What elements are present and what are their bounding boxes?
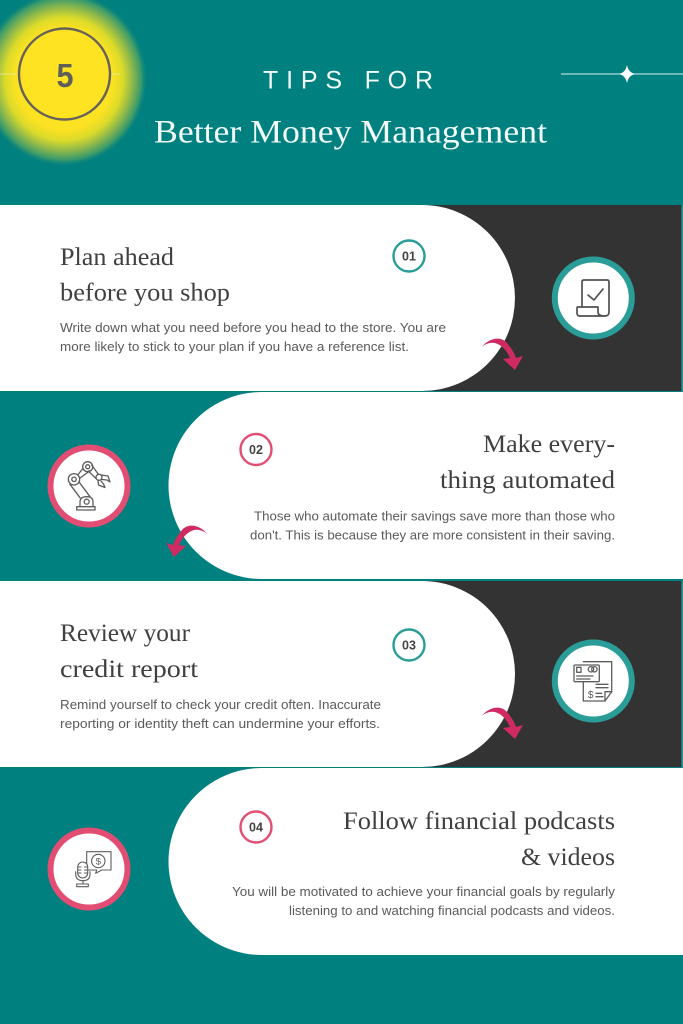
panel: tip 1	[0, 205, 683, 391]
icon: credit card and invoice	[555, 642, 632, 720]
panel: tip 2	[0, 392, 683, 579]
text: tip 1	[60, 320, 446, 354]
text: tip 3: Remind yourself to check your credit often. Inaccurate	[60, 697, 381, 712]
heading: tip 3: credit report	[60, 656, 198, 683]
number 04: 04	[249, 820, 263, 834]
text: tip 4	[232, 884, 616, 918]
number 03: 03	[402, 638, 416, 652]
text: tip 1: Write down what you need before you head to the store. You are	[60, 320, 446, 335]
text: tip 2: Those who automate their savings save more than those who	[254, 508, 615, 524]
title: Better Money Management	[154, 114, 547, 150]
heading: tip 4	[343, 808, 615, 871]
heading: tip 1: Plan ahead	[60, 244, 175, 271]
heading: tip 4: Follow financial podcasts	[343, 808, 615, 835]
number 04	[240, 812, 272, 842]
heading: tip 2: Make every-	[483, 431, 615, 458]
heading: tip 1	[60, 244, 230, 306]
text: tip 2	[250, 508, 615, 542]
icon: checklist scroll	[555, 260, 632, 336]
badge: number 5	[0, 0, 148, 167]
text: tip 4: listening to and watching financial podcasts and videos.	[289, 903, 615, 918]
sparkle line	[561, 65, 683, 83]
number 01: 01	[402, 250, 416, 264]
text: tip 3	[60, 697, 381, 731]
heading: tip 3	[60, 620, 198, 683]
heading: tip 3: Review your	[60, 620, 191, 647]
number 01	[394, 240, 424, 272]
panel: tip 4	[0, 768, 683, 955]
icon: credit card and invoice: $	[588, 690, 594, 701]
icon: podcast microphone: $	[96, 856, 102, 868]
number 03	[394, 630, 424, 660]
number 02: 02	[249, 443, 263, 457]
text: tip 4: You will be motivated to achieve your financial goals by regularly	[232, 884, 616, 899]
heading: tip 2	[440, 431, 616, 494]
header	[0, 0, 683, 167]
number 02	[240, 434, 272, 465]
heading: tips for: TIPS FOR	[263, 66, 433, 94]
arrow: tip 3	[482, 708, 523, 739]
arrow: tip 2	[166, 526, 207, 557]
panel: tip 3	[0, 581, 683, 767]
text: tip 1: more likely to stick to your plan if you have a reference list.	[60, 339, 409, 354]
badge: number 5: 5	[56, 57, 74, 94]
heading: tip 2: thing automated	[440, 467, 616, 494]
icon: podcast microphone	[50, 830, 128, 908]
text: tip 3: reporting or identity theft can undermine your efforts.	[60, 716, 380, 731]
icon: robot arm	[50, 448, 128, 524]
heading: tip 4: & videos	[521, 844, 615, 871]
arrow: tip 1	[482, 339, 523, 370]
heading: tip 1: before you shop	[60, 280, 230, 306]
text: tip 2: don't. This is because they are more consistent in their saving.	[250, 528, 615, 542]
